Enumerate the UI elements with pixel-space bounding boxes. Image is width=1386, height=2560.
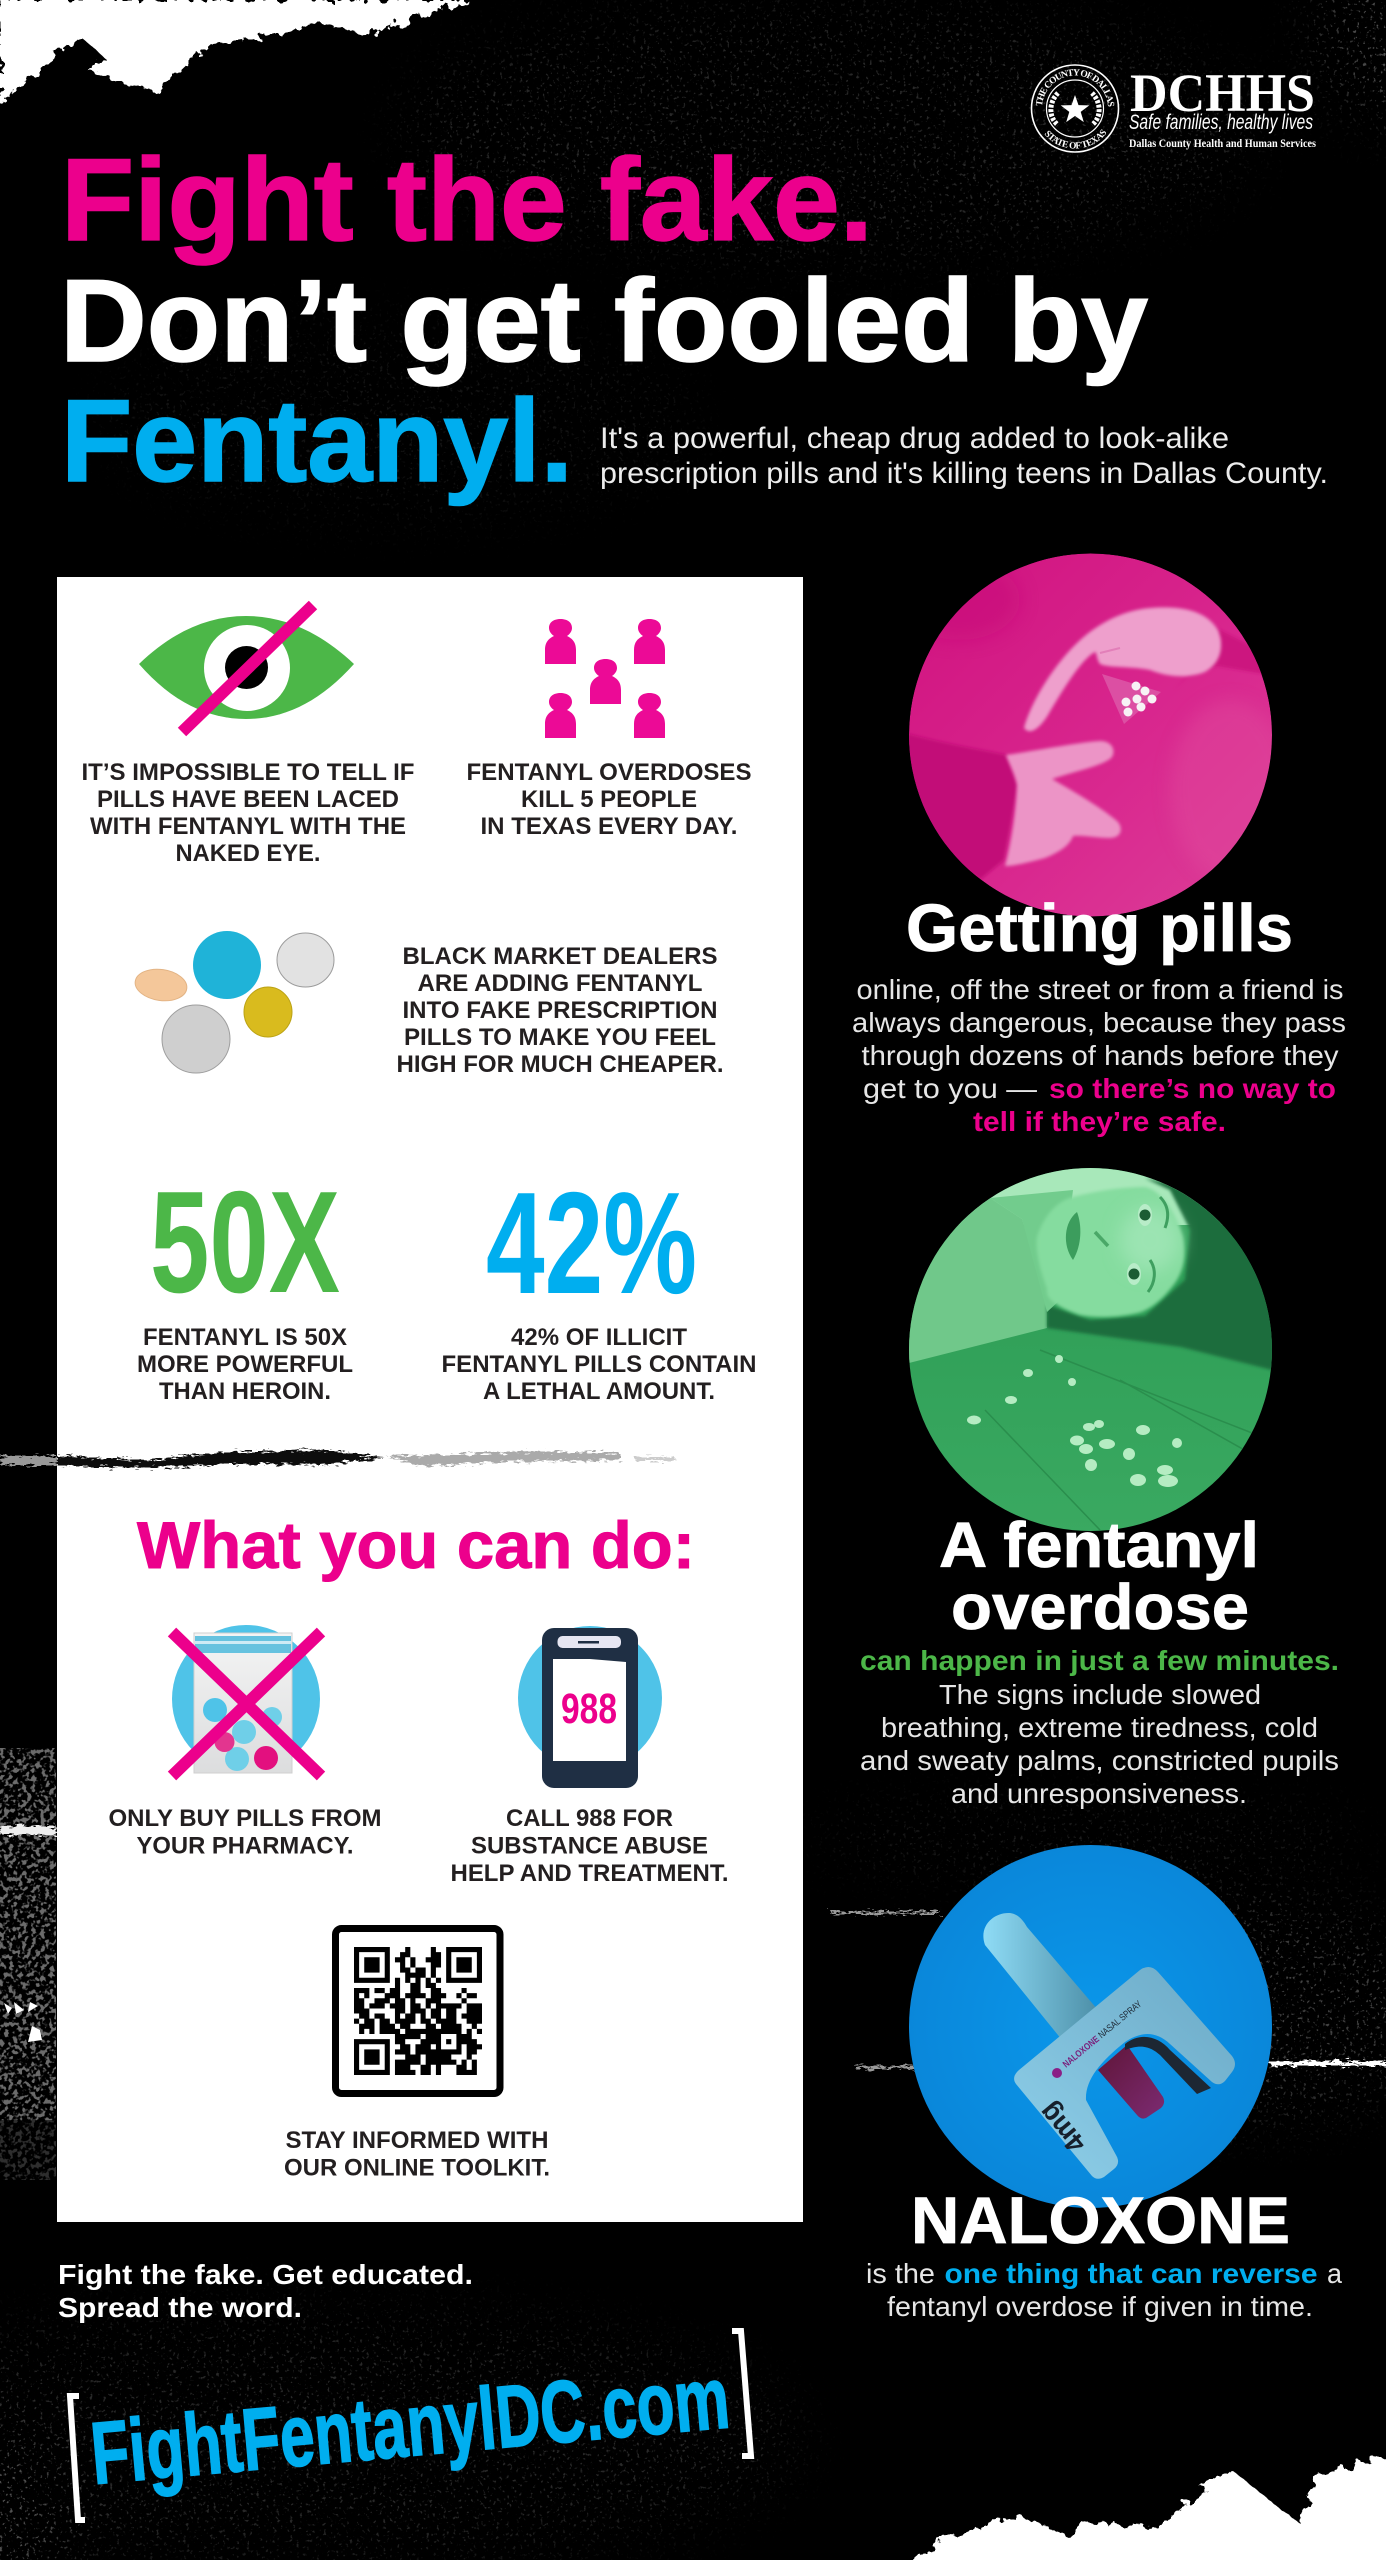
title: Fight the fake.	[61, 134, 873, 265]
caption: only buy from pharmacy	[108, 1805, 382, 1860]
heading: a fentanyl overdose	[939, 1509, 1259, 1643]
logo: DCHHS	[1030, 63, 1316, 153]
upper hand	[1024, 607, 1221, 731]
dark sleeve, lower left	[905, 733, 1018, 880]
caption: call 988: HELP AND TREATMENT.	[450, 1860, 728, 1887]
caption: only buy from pharmacy: YOUR PHARMACY.	[136, 1832, 354, 1860]
caption: 50x more powerful: FENTANYL IS 50X	[143, 1324, 347, 1351]
caption: black market dealers: PILLS TO MAKE YOU FEEL	[404, 1024, 716, 1051]
torn streak across panel	[57, 1450, 675, 1468]
text: overdose body: The signs include slowed	[939, 1679, 1261, 1710]
stat: 50X: 50X	[150, 1161, 340, 1323]
caption: online toolkit	[284, 2127, 550, 2182]
nose	[1095, 1232, 1108, 1246]
text: naloxone body: fentanyl overdose if given in time.	[887, 2291, 1313, 2322]
text: naloxone body: a	[1327, 2258, 1342, 2289]
caption: 50x more powerful: THAN HEROIN.	[159, 1378, 331, 1405]
text: getting pills body: through dozens of hands before they	[862, 1040, 1338, 1071]
caption: black market dealers: HIGH FOR MUCH CHEAPER.	[396, 1051, 724, 1078]
lower hand	[1005, 741, 1121, 866]
heading: a fentanyl overdose: A fentanyl	[939, 1509, 1259, 1581]
caption: impossible to tell: WITH FENTANYL WITH THE	[90, 813, 406, 840]
logo: DCHHS: THE COUNTY OF DALLAS	[1036, 69, 1114, 106]
caption: 42% lethal: FENTANYL PILLS CONTAIN	[442, 1351, 756, 1378]
caption: call 988: CALL 988 FOR	[506, 1805, 673, 1832]
subtitle	[600, 422, 1328, 490]
text: naloxone body: is the	[866, 2258, 935, 2289]
caption: 42% lethal: A LETHAL AMOUNT.	[483, 1378, 715, 1405]
illustration: naloxone nasal spray	[909, 1845, 1272, 2208]
caption: impossible to tell: PILLS HAVE BEEN LACED	[97, 786, 399, 813]
illustration: naloxone nasal spray: NALOXONE NASAL SPRAY	[1061, 1998, 1145, 2070]
panel: facts and actions	[57, 577, 803, 2222]
text: getting pills body	[852, 974, 1346, 1137]
text: getting pills body: tell if they’re safe.	[973, 1106, 1226, 1137]
eyes	[1138, 1204, 1152, 1226]
title	[60, 134, 1148, 506]
text: getting pills body: so there’s no way to	[1049, 1073, 1336, 1104]
logo seal	[1032, 65, 1118, 152]
caption: overdoses per day: KILL 5 PEOPLE	[521, 786, 697, 813]
QR code	[336, 1928, 500, 2094]
mouth	[1066, 1212, 1080, 1260]
icon: phone showing 988: 988	[561, 1685, 617, 1733]
caption: impossible to tell	[82, 759, 414, 867]
text: getting pills body: get to you —	[863, 1073, 1037, 1104]
text: get educated call to action	[58, 2259, 473, 2323]
icon: five people	[545, 619, 665, 738]
icon: assorted pills	[133, 931, 334, 1073]
text: overdose body: and sweaty palms, constricted pupils	[860, 1745, 1339, 1776]
neck and shoulder	[990, 1190, 1073, 1312]
caption: black market dealers	[396, 943, 724, 1078]
heading: getting pills: Getting pills	[906, 891, 1293, 966]
icon: crossed-out eye	[139, 605, 354, 732]
face	[1037, 1187, 1184, 1317]
subtitle: It's a powerful, cheap drug added to look-alike	[600, 422, 1229, 455]
website address with brackets	[70, 2331, 751, 2520]
text: getting pills body: always dangerous, because they pass	[852, 1007, 1346, 1038]
caption: black market dealers: BLACK MARKET DEALERS	[402, 943, 718, 970]
text: getting pills body: online, off the street or from a friend is	[856, 974, 1344, 1005]
hair	[1047, 1178, 1280, 1372]
caption: black market dealers: INTO FAKE PRESCRIPTION	[402, 997, 718, 1024]
title: Fentanyl.	[61, 375, 573, 506]
caption: black market dealers: ARE ADDING FENTANYL	[418, 970, 702, 997]
pill bag	[1102, 674, 1161, 724]
caption: 50x more powerful: MORE POWERFUL	[137, 1351, 353, 1378]
caption: online toolkit: OUR ONLINE TOOLKIT.	[284, 2154, 550, 2182]
caption: only buy from pharmacy: ONLY BUY PILLS FROM	[108, 1805, 382, 1832]
caption: impossible to tell: NAKED EYE.	[176, 840, 320, 867]
heading: what you can do: What you can do:	[137, 1508, 695, 1582]
caption: 42% lethal	[442, 1324, 756, 1405]
text: overdose body: and unresponsiveness.	[951, 1778, 1247, 1809]
text: overdose body: breathing, extreme tiredness, cold	[881, 1712, 1318, 1743]
caption: overdoses per day: IN TEXAS EVERY DAY.	[480, 813, 738, 840]
photo circle: woman on floor with pills	[905, 1165, 1280, 1535]
title: Don’t get fooled by	[60, 255, 1148, 386]
website address with brackets: FightFentanylDC.com	[87, 2347, 733, 2503]
caption: 50x more powerful	[137, 1324, 353, 1405]
caption: 42% lethal: 42% OF ILLICIT	[511, 1324, 687, 1351]
floor boards	[985, 1350, 1280, 1530]
dark sleeve, upper right	[1212, 628, 1262, 676]
icon: phone showing 988	[518, 1626, 662, 1788]
text: get educated call to action: Spread the word.	[58, 2292, 302, 2323]
caption: online toolkit: STAY INFORMED WITH	[286, 2127, 548, 2154]
logo tagline: Safe families, healthy lives	[1129, 111, 1313, 134]
logo department name: Dallas County Health and Human Services	[1129, 138, 1316, 150]
stat: 42%: 42%	[486, 1162, 697, 1324]
caption: overdoses per day	[466, 759, 752, 840]
illustration: naloxone nasal spray: 4mg	[1032, 2097, 1092, 2159]
floor pills	[967, 1355, 1182, 1487]
wall	[958, 1168, 1222, 1225]
pillow	[905, 1198, 1047, 1364]
caption: call 988	[450, 1805, 728, 1887]
caption: impossible to tell: IT’S IMPOSSIBLE TO TELL IF	[82, 759, 414, 786]
logo: DCHHS: STATE OF TEXAS	[1044, 129, 1106, 149]
subtitle: prescription pills and it's killing teens in Dallas County.	[600, 457, 1328, 490]
photo circle: hands exchanging pills	[900, 554, 1290, 916]
icon: crossed-out pill bag	[172, 1625, 321, 1776]
text: overdose body: can happen in just a few minutes.	[860, 1645, 1339, 1676]
text: naloxone body	[866, 2258, 1342, 2322]
text: naloxone body: one thing that can reverse	[944, 2258, 1318, 2289]
text: get educated call to action: Fight the fake. Get educated.	[58, 2259, 473, 2290]
text: overdose body	[860, 1645, 1339, 1809]
logo wordmark: DCHHS	[1130, 63, 1315, 123]
caption: call 988: SUBSTANCE ABUSE	[471, 1832, 708, 1860]
caption: overdoses per day: FENTANYL OVERDOSES	[466, 759, 752, 786]
heading: a fentanyl overdose: overdose	[951, 1571, 1249, 1643]
heading: naloxone: NALOXONE	[911, 2183, 1290, 2257]
